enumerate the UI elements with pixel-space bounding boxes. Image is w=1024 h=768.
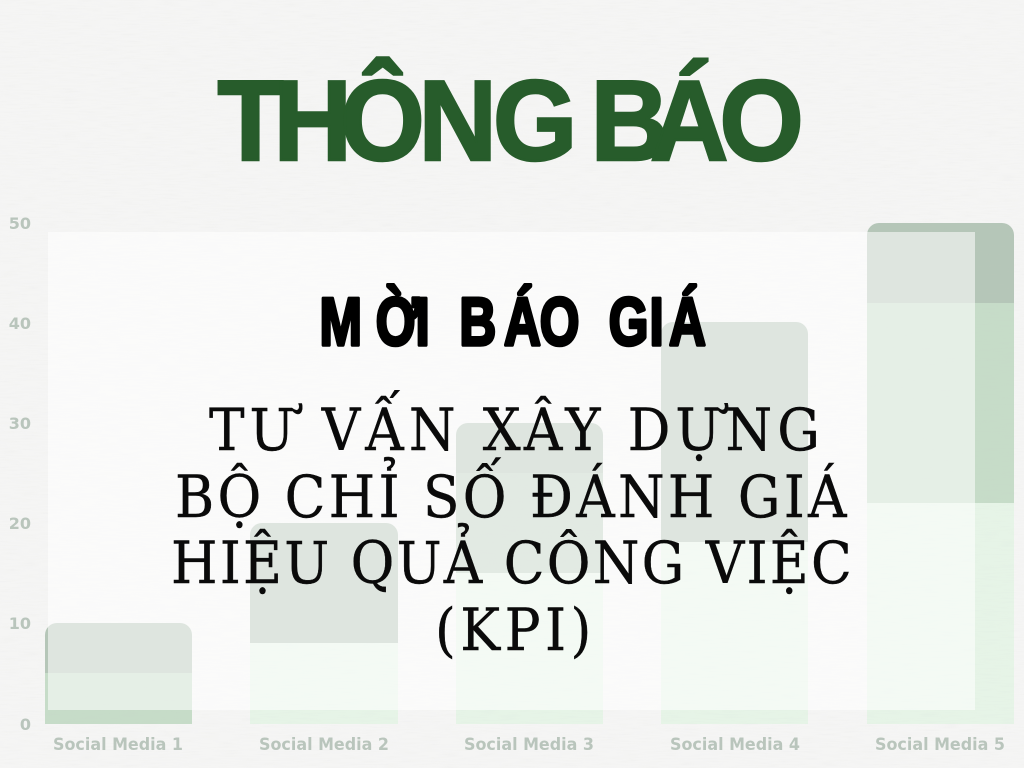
bar: social media 3 xyxy=(456,423,603,724)
bar: social media 5 xyxy=(867,223,1014,724)
body text: tư vấn xây dựng: (KPI) xyxy=(435,597,591,665)
bar: social media 1 xyxy=(45,623,192,724)
y axis labels: 40 xyxy=(9,314,31,333)
body text: tư vấn xây dựng: BỘ CHỈ SỐ ĐÁNH GIÁ xyxy=(175,457,847,532)
x axis labels: Social Media 5 xyxy=(875,735,1005,755)
x axis labels: Social Media 3 xyxy=(464,735,594,755)
x axis labels: Social Media 4 xyxy=(670,735,800,755)
bar: social media 2 xyxy=(250,523,398,724)
translucent plot overlay xyxy=(48,232,975,710)
title: THÔNG BÁO xyxy=(218,56,804,185)
y axis labels: 0 xyxy=(20,715,31,734)
body text: tư vấn xây dựng xyxy=(171,390,852,665)
y axis labels: 30 xyxy=(9,414,31,433)
y axis labels: 20 xyxy=(9,514,31,533)
y axis labels xyxy=(9,214,31,734)
x axis labels xyxy=(53,735,1005,755)
bar: social media 4 xyxy=(661,322,808,724)
y axis labels: 10 xyxy=(9,614,31,633)
y axis labels: 50 xyxy=(9,214,31,233)
x axis labels: Social Media 1 xyxy=(53,735,183,755)
body text: tư vấn xây dựng: HIỆU QUẢ CÔNG VIỆC xyxy=(171,523,852,598)
x axis labels: Social Media 2 xyxy=(259,735,389,755)
body text: tư vấn xây dựng: TƯ VẤN XÂY DỰNG xyxy=(209,390,820,465)
subtitle: mời báo giá: MỜI BÁO GIÁ xyxy=(320,284,706,360)
